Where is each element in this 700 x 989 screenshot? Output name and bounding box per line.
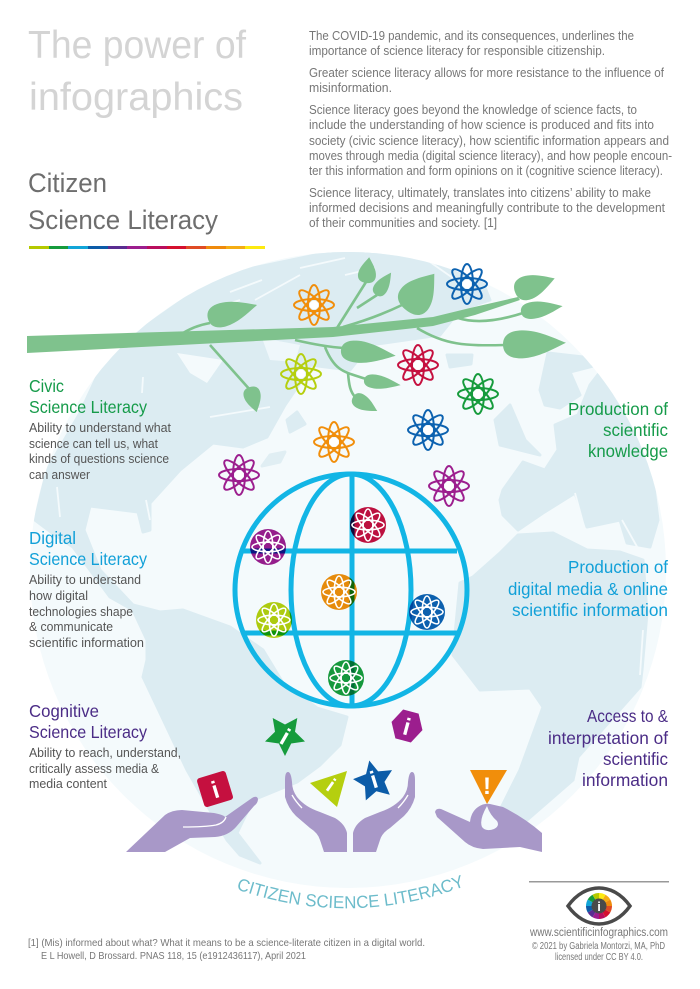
intro text: Science literacy goes beyond the knowledge of science facts, to bbox=[309, 102, 637, 117]
civic science literacy label: Science Literacy bbox=[29, 397, 147, 417]
civic science literacy label: science can tell us, what bbox=[29, 437, 158, 451]
digital science literacy label: how digital bbox=[29, 589, 88, 603]
website and licence: www.scientificinfographics.com bbox=[529, 927, 668, 939]
information icons: i bbox=[208, 777, 223, 804]
intro text: of their communities and society. [1] bbox=[309, 215, 497, 230]
subtitle: Citizen bbox=[28, 168, 107, 198]
intro text: importance of science literacy for responsible citizenship. bbox=[309, 43, 605, 58]
cognitive science literacy label: media content bbox=[29, 777, 108, 791]
reference note: E L Howell, D Brossard. PNAS 118, 15 (e1912436117), April 2021 bbox=[41, 950, 306, 962]
intro text: Greater science literacy allows for more resistance to the influence of bbox=[309, 65, 664, 80]
civic science literacy label: Civic bbox=[29, 376, 64, 396]
globe atom discs bbox=[250, 507, 445, 696]
intro text: The COVID-19 pandemic, and its consequences, underlines the bbox=[309, 28, 634, 43]
world globe background bbox=[30, 252, 666, 888]
digital science literacy label: & communicate bbox=[29, 620, 113, 634]
rainbow bar bbox=[29, 246, 265, 249]
production of digital media label: scientific information bbox=[512, 600, 668, 620]
information icons: i bbox=[275, 724, 294, 751]
information icons bbox=[196, 707, 507, 808]
digital science literacy label: Digital bbox=[29, 528, 76, 548]
website and licence bbox=[529, 927, 668, 963]
production of scientific knowledge label: Production of bbox=[568, 399, 668, 419]
subtitle bbox=[28, 168, 218, 235]
cognitive science literacy label: Science Literacy bbox=[29, 722, 147, 742]
cognitive science literacy label: critically assess media & bbox=[29, 762, 160, 776]
digital science literacy label: Science Literacy bbox=[29, 549, 147, 569]
intro text: informed decisions and meaningfully contribute to the development bbox=[309, 200, 665, 215]
title: The power of bbox=[28, 24, 246, 67]
access and interpretation label: scientific bbox=[603, 749, 668, 769]
production of scientific knowledge label: knowledge bbox=[588, 441, 668, 461]
access and interpretation label bbox=[548, 706, 668, 790]
access and interpretation label: Access to & bbox=[587, 706, 668, 726]
digital science literacy label bbox=[29, 528, 147, 650]
information icons: i bbox=[322, 775, 339, 796]
wireframe globe bbox=[235, 474, 467, 706]
information icons: i bbox=[367, 767, 381, 794]
civic science literacy label bbox=[29, 376, 172, 482]
intro text: include the understanding of how science is produced and fits into bbox=[309, 117, 654, 132]
reference note bbox=[28, 937, 425, 962]
digital science literacy label: scientific information bbox=[29, 636, 144, 650]
logo divider bbox=[529, 881, 669, 882]
civic science literacy label: can answer bbox=[29, 468, 90, 482]
access and interpretation label: information bbox=[582, 770, 668, 790]
website and licence: © 2021 by Gabriela Montorzi, MA, PhD bbox=[532, 941, 665, 952]
reference note: [1] (Mis) informed about what? What it means to be a science-literate citizen in a digital world. bbox=[28, 937, 425, 949]
production of digital media label: digital media & online bbox=[508, 579, 668, 599]
information icons: i bbox=[400, 714, 413, 741]
title bbox=[28, 24, 246, 119]
production of scientific knowledge label: scientific bbox=[603, 420, 668, 440]
cognitive science literacy label bbox=[29, 701, 181, 791]
intro text: ter this information and form opinions on it (cognitive science literacy). bbox=[309, 163, 663, 178]
digital science literacy label: technologies shape bbox=[29, 605, 133, 619]
citizen science literacy curved caption: CITIZEN SCIENCE LITERACY bbox=[238, 875, 461, 908]
production of digital media label bbox=[508, 557, 668, 620]
title: infographics bbox=[29, 76, 243, 119]
access and interpretation label: interpretation of bbox=[548, 728, 668, 748]
hands bbox=[126, 772, 542, 852]
civic science literacy label: kinds of questions science bbox=[29, 452, 169, 466]
production of scientific knowledge label bbox=[568, 399, 668, 461]
website and licence: licensed under CC BY 4.0. bbox=[555, 952, 643, 963]
subtitle: Science Literacy bbox=[28, 205, 218, 235]
intro text: society (civic science literacy), how scientific information appears and bbox=[309, 133, 669, 148]
eye logo bbox=[568, 888, 630, 924]
digital science literacy label: Ability to understand bbox=[29, 573, 141, 587]
intro text bbox=[309, 28, 672, 230]
eye logo: i bbox=[597, 899, 601, 914]
information icons: ! bbox=[483, 773, 491, 800]
intro text: misinformation. bbox=[309, 80, 392, 95]
cognitive science literacy label: Ability to reach, understand, bbox=[29, 746, 181, 760]
production of digital media label: Production of bbox=[568, 557, 668, 577]
branch with leaves bbox=[27, 256, 566, 417]
intro text: Science literacy, ultimately, translates into citizens’ ability to make bbox=[309, 185, 651, 200]
civic science literacy label: Ability to understand what bbox=[29, 421, 172, 435]
cognitive science literacy label: Cognitive bbox=[29, 701, 99, 721]
floating atoms bbox=[219, 264, 498, 506]
